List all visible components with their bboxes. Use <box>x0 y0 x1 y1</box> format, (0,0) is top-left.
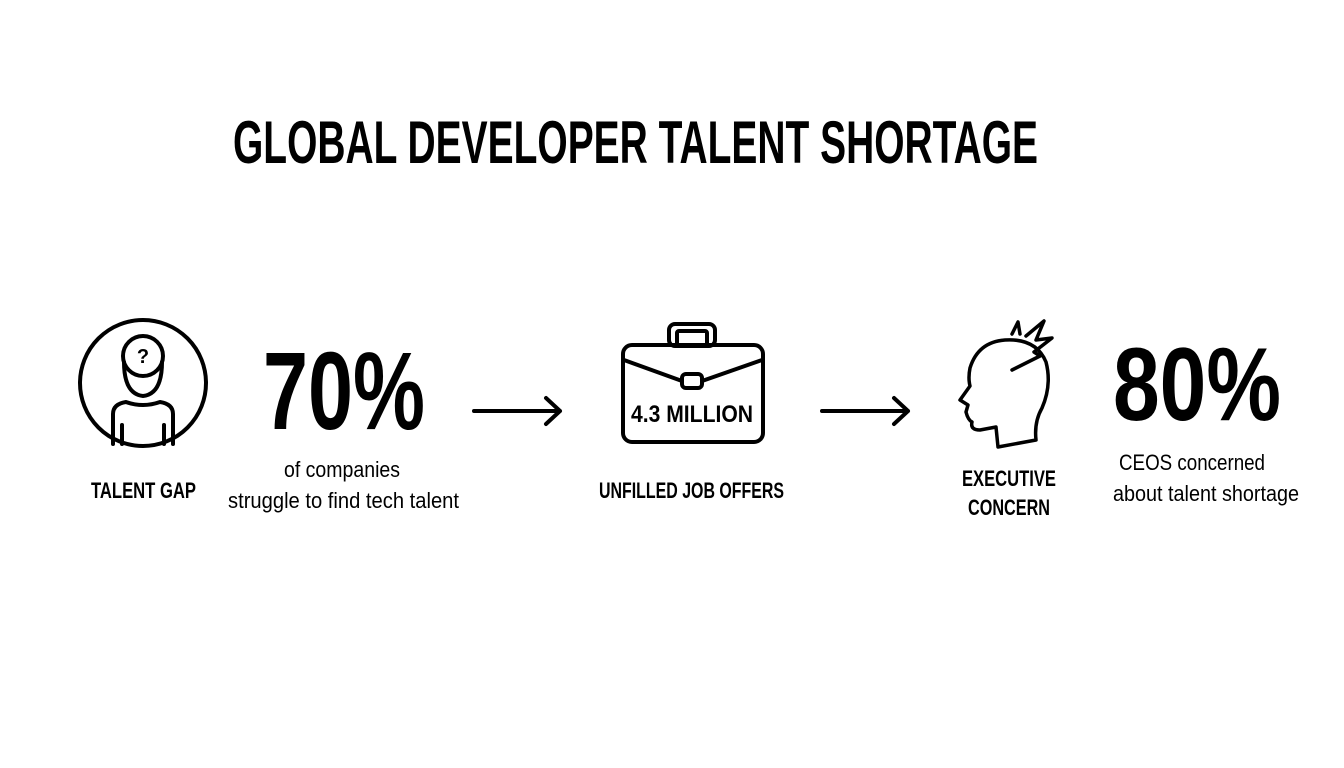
label: executive concern <box>962 466 1056 520</box>
text: 70% description: of companies <box>284 457 400 482</box>
text: 70% description: struggle to find tech talent <box>228 488 459 513</box>
icon: briefcase with 4.3 million: 4.3 MILLION <box>631 401 753 428</box>
arrow 2 <box>822 398 908 424</box>
text: 80% description: about talent shortage <box>1113 481 1299 506</box>
icon: person with question mark: ? <box>137 346 149 368</box>
text: 80% description: CEOS concerned <box>1119 450 1265 475</box>
icon: stressed head <box>960 321 1052 447</box>
icon: person with question mark <box>80 320 206 446</box>
label: talent gap: TALENT GAP <box>91 478 196 503</box>
text: 70% description <box>228 457 459 513</box>
icon: briefcase with 4.3 million <box>623 324 763 442</box>
label: executive concern: EXECUTIVE <box>962 466 1056 491</box>
arrow 1 <box>474 398 560 424</box>
label: executive concern: CONCERN <box>968 495 1050 520</box>
stat: 70%: 70% <box>263 330 425 453</box>
text: 80% description <box>1113 450 1299 506</box>
stat: 80%: 80% <box>1113 327 1281 443</box>
label: unfilled job offers: UNFILLED JOB OFFERS <box>599 478 784 503</box>
